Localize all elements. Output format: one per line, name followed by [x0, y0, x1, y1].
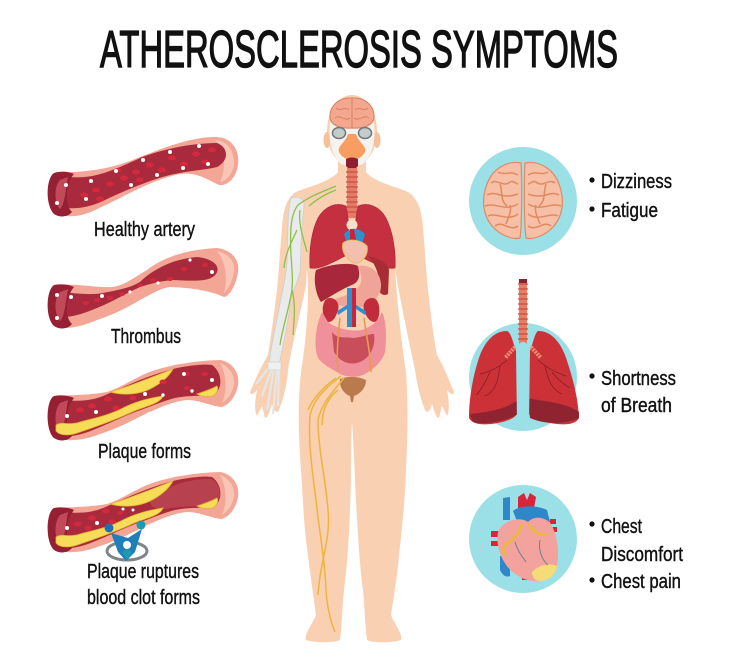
plaque deposits [56, 481, 218, 547]
intestines [315, 312, 386, 377]
symptom list: of Breath [601, 395, 672, 417]
icon backdrop [469, 485, 577, 593]
skull [329, 118, 375, 166]
plaque deposits [56, 369, 218, 435]
symptom list: Chest pain [601, 571, 681, 593]
hand bones [256, 366, 279, 414]
symptom list: Shortness [601, 368, 676, 390]
bronchi [346, 220, 358, 230]
icon: heart [491, 493, 558, 581]
kidneys [323, 298, 379, 322]
nerves: arm [280, 186, 336, 345]
trachea [347, 168, 357, 218]
icon: brain [484, 162, 562, 238]
eye sockets [332, 128, 372, 138]
lungs [310, 204, 395, 268]
artery: plaque ruptures [48, 472, 238, 552]
liver [315, 264, 359, 302]
artery: thrombus [48, 248, 238, 328]
icon backdrop [469, 147, 577, 255]
ears [324, 132, 330, 148]
symptom list: Discomfort [601, 544, 683, 566]
panel: lungs symptom [469, 279, 676, 431]
throat [346, 158, 358, 170]
panel: brain symptom [469, 147, 672, 255]
artery: plaque forms [48, 360, 238, 440]
panel: human body [250, 95, 454, 642]
icon: lungs [469, 331, 579, 428]
icon: watermark logo [104, 520, 147, 561]
heart [343, 229, 367, 263]
symptom list: Dizziness [601, 171, 672, 193]
stomach [332, 266, 381, 308]
aorta and vena cava [337, 288, 366, 327]
label: thrombus: Thrombus [111, 326, 181, 348]
nerves: leg [308, 376, 344, 632]
symptom list [589, 368, 676, 417]
head [327, 95, 377, 167]
artery: healthy [48, 137, 238, 216]
label: healthy artery: Healthy artery [94, 219, 195, 241]
symptom list: Chest [601, 516, 642, 538]
icon backdrop [469, 323, 577, 431]
panel: heart symptom [469, 485, 683, 593]
panel: artery stages [48, 137, 238, 609]
symptom list [589, 171, 672, 222]
label: plaque forms: Plaque forms [98, 441, 191, 463]
symptom list: Fatigue [601, 200, 658, 222]
symptom list [589, 516, 683, 593]
label: plaque ruptures: Plaque ruptures [87, 561, 199, 583]
label: blood clot forms: blood clot forms [87, 587, 200, 609]
spleen [368, 256, 389, 295]
brain [330, 98, 374, 128]
ureters [337, 318, 371, 372]
icon: trachea [518, 279, 528, 345]
body silhouette [250, 160, 454, 642]
arm skeleton [256, 197, 304, 414]
blood clot [150, 479, 220, 509]
bladder [340, 377, 366, 402]
nasal cavity [339, 134, 365, 160]
